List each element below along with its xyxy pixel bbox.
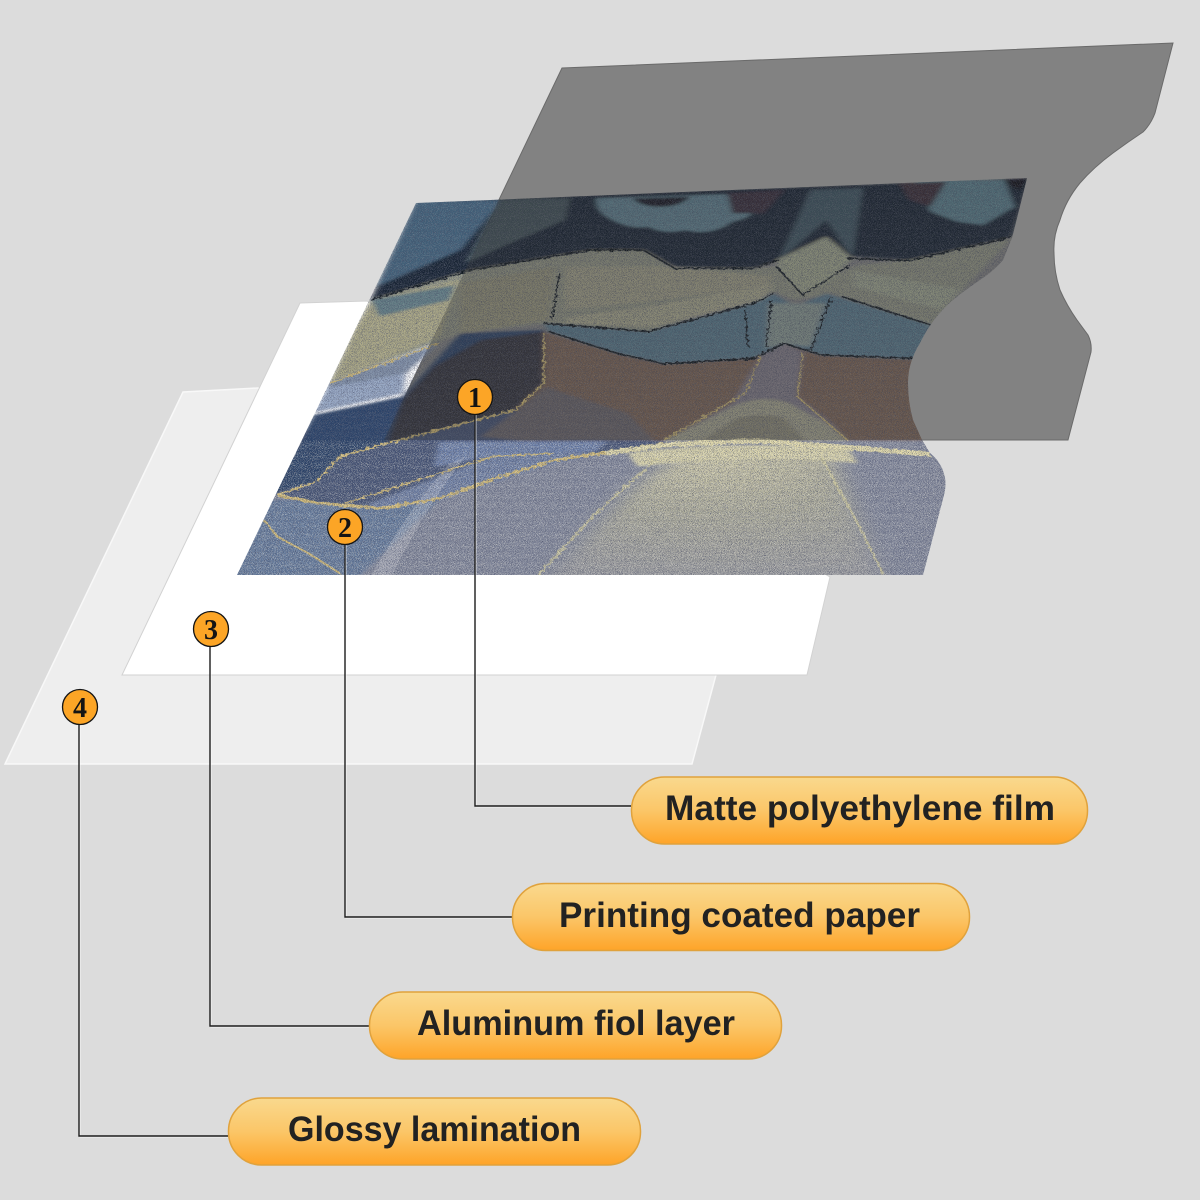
painted colour fields	[220, 178, 1030, 583]
marker 3: 3	[204, 615, 218, 646]
bright streak under film edge	[434, 442, 607, 467]
translucent swoosh	[371, 457, 465, 575]
marker 1	[458, 380, 492, 414]
inner dome	[701, 415, 805, 441]
pale blue stripe	[314, 373, 405, 413]
cream horizon band	[627, 445, 858, 467]
label: printing coated paper	[512, 884, 970, 950]
olive band	[329, 238, 1012, 383]
gold vein lines	[264, 333, 931, 575]
light grain upper	[220, 170, 1067, 441]
label: aluminum foil layer: Aluminum fiol layer	[417, 1004, 735, 1043]
central mauve column	[685, 344, 842, 433]
leader line 2	[345, 545, 512, 918]
marker 2	[328, 510, 362, 544]
layer 1 backing: matte film	[384, 43, 1173, 440]
central slate	[779, 188, 863, 260]
left olive under film	[460, 267, 554, 333]
navy left area	[272, 330, 544, 495]
label: glossy lamination: Glossy lamination	[288, 1110, 581, 1149]
label: aluminum foil layer	[370, 992, 782, 1059]
layer 4: glossy lamination sheet	[5, 388, 716, 764]
marker 4: 4	[73, 693, 87, 724]
label: printing coated paper: Printing coated paper	[559, 896, 920, 935]
teal lower band	[544, 293, 931, 364]
brown field	[515, 332, 931, 441]
lower marble base	[272, 430, 946, 575]
marker 2: 2	[338, 513, 352, 544]
beige lower streak	[565, 283, 774, 327]
layer 2: printed marble paper	[237, 178, 1027, 575]
marker 3	[194, 612, 228, 646]
marker 1: 1	[468, 383, 482, 414]
leader line 4	[79, 725, 228, 1137]
marker 4	[62, 690, 98, 724]
teal blob left	[596, 193, 758, 232]
dark vein lines	[371, 237, 1012, 364]
film overlay on marble	[384, 43, 1173, 440]
grey teal right wedge	[854, 272, 958, 308]
maroon shadow right	[899, 182, 947, 207]
top right dark spot	[1008, 179, 1026, 189]
dark grain	[220, 170, 1067, 590]
layer 3: aluminum foil sheet	[122, 301, 830, 675]
cream central glow	[546, 458, 884, 575]
beige left area	[329, 280, 460, 383]
beige upper patch	[565, 267, 774, 310]
top olive slate	[465, 198, 570, 263]
grey blue band	[326, 345, 436, 390]
mauve blue smear	[481, 387, 654, 441]
central dome	[664, 399, 847, 441]
leader line 3	[210, 647, 369, 1027]
dark brown area	[387, 332, 544, 443]
dark blue band between gold lines	[277, 410, 664, 508]
leader line 1	[475, 415, 631, 807]
lower left blue wash	[237, 500, 438, 575]
top navy band	[371, 178, 1030, 300]
light grain lower	[220, 441, 1067, 591]
maroon shadow	[727, 190, 784, 213]
teal central column	[766, 303, 826, 348]
mid blue band	[366, 453, 607, 509]
label: matte polyethylene film	[632, 777, 1088, 844]
top left slate	[376, 200, 502, 287]
label: glossy lamination	[228, 1098, 640, 1165]
slate patch in beige	[371, 285, 455, 317]
dark spot	[633, 197, 690, 207]
label: matte polyethylene film: Matte polyethylene film	[665, 789, 1055, 828]
teal blob right	[915, 180, 1014, 225]
central chevron	[777, 237, 852, 293]
